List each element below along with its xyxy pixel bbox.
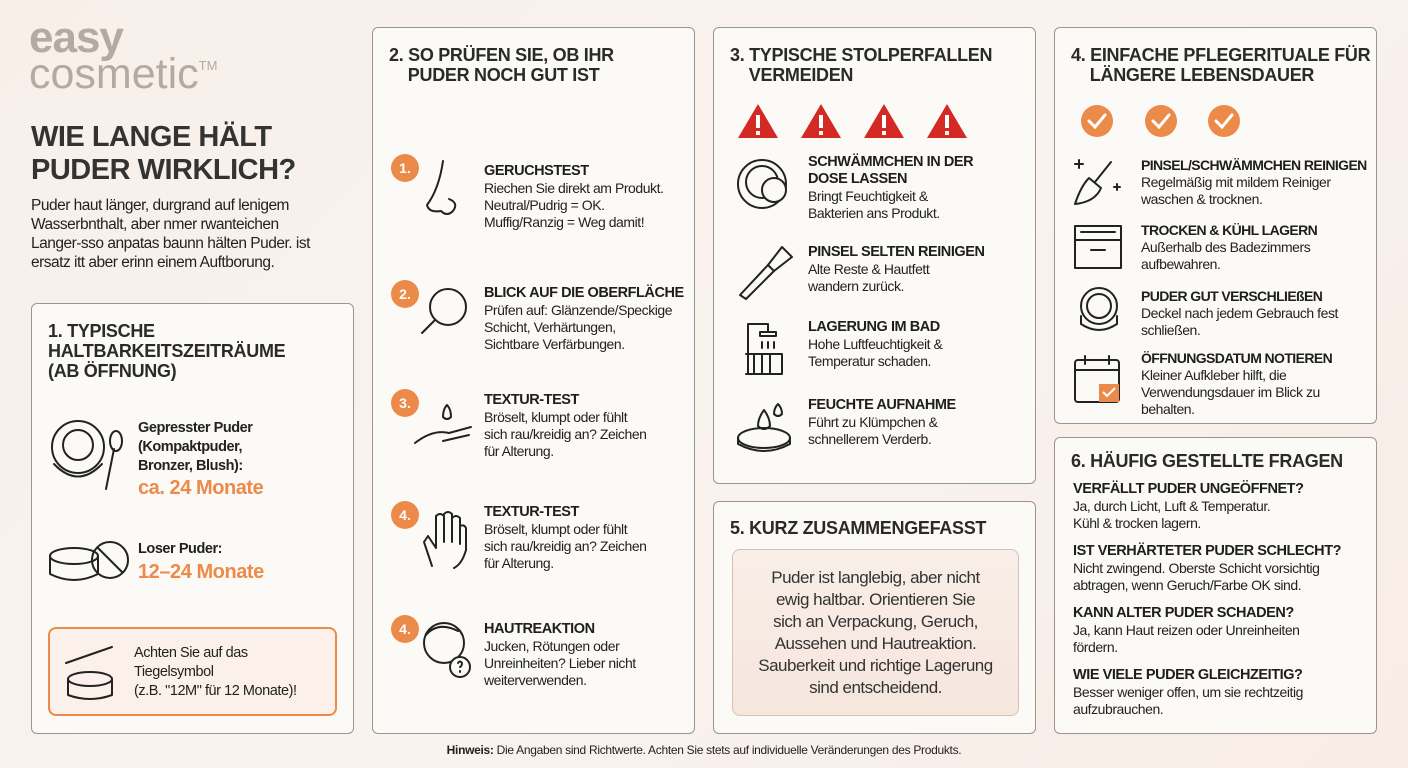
text: pressed powder: ca. 24 Monate — [138, 477, 263, 499]
logo: easy — [29, 13, 123, 62]
step 4: für Alterung. — [484, 555, 554, 571]
item: brush: Alte Reste & Hautfett — [808, 261, 929, 277]
faq 1: Ja, durch Licht, Luft & Temperatur. — [1073, 498, 1270, 514]
faq 1: Kühl & trocken lagern. — [1073, 515, 1201, 531]
step 2: BLICK AUF DIE OBERFLÄCHE — [484, 285, 684, 301]
text: loose powder: Loser Puder: — [138, 541, 222, 557]
panel: 6 FAQ — [1054, 437, 1377, 734]
item: bathroom — [745, 319, 943, 375]
item: sponge: Bakterien ans Produkt. — [808, 205, 940, 221]
intro text — [31, 197, 310, 271]
panel: 3 pitfalls — [713, 27, 1036, 484]
item: close: PUDER GUT VERSCHLIEßEN — [1141, 288, 1322, 304]
text: pressed powder: Gepresster Puder — [138, 420, 252, 436]
step 4: TEXTUR-TEST — [484, 504, 579, 520]
faq 1: VERFÄLLT PUDER UNGEÖFFNET? — [1073, 481, 1304, 497]
item: moisture: schnellerem Verderb. — [808, 431, 931, 447]
heading: 1. TYPISCHE — [48, 321, 155, 341]
step 1 — [391, 154, 663, 230]
icon: compact — [51, 420, 123, 490]
item: close — [1080, 287, 1338, 338]
text: pressed powder — [138, 420, 264, 499]
step 1: Muffig/Ranzig = Weg damit! — [484, 214, 644, 230]
step 3: 3. — [399, 395, 411, 411]
step 2: Prüfen auf: Glänzende/Speckige — [484, 302, 672, 318]
item: brush: wandern zurück. — [808, 278, 904, 294]
step 1: 1. — [399, 160, 411, 176]
item: date: Kleiner Aufkleber hilft, die — [1141, 367, 1286, 383]
step 1: GERUCHSTEST — [484, 163, 589, 179]
faq 3: KANN ALTER PUDER SCHADEN? — [1073, 605, 1294, 621]
item: storage — [1074, 222, 1317, 272]
intro text: ersatz itt aber erinn einem Auftborung. — [31, 254, 274, 271]
step 3: für Alterung. — [484, 443, 554, 459]
summary box: sind entscheidend. — [809, 678, 942, 697]
step 5: weiterverwenden. — [484, 672, 587, 688]
step 1: Riechen Sie direkt am Produkt. — [484, 180, 663, 196]
item: sponge — [737, 153, 974, 221]
icons: warnings — [738, 104, 967, 138]
item: date: ÖFFNUNGSDATUM NOTIEREN — [1141, 350, 1332, 366]
callout: jar symbol: Achten Sie auf das — [134, 645, 248, 661]
item: close: Deckel nach jedem Gebrauch fest — [1141, 305, 1338, 321]
item: date: Verwendungsdauer im Blick zu — [1141, 384, 1320, 400]
step 5: HAUTREAKTION — [484, 621, 595, 637]
item: moisture — [737, 397, 956, 452]
callout: jar symbol: Tiegelsymbol — [134, 664, 213, 680]
step 4: sich rau/kreidig an? Zeichen — [484, 538, 646, 554]
item: sponge: DOSE LASSEN — [808, 171, 907, 187]
item: storage: TROCKEN & KÜHL LAGERN — [1141, 222, 1317, 238]
summary box: Aussehen und Hautreaktion. — [775, 634, 976, 653]
step 4: Bröselt, klumpt oder fühlt — [484, 521, 627, 537]
item: bathroom: Temperatur schaden. — [808, 353, 931, 369]
step 4: 4. — [399, 507, 411, 523]
faq 2: Nicht zwingend. Oberste Schicht vorsichtig — [1073, 560, 1319, 576]
title: PUDER WIRKLICH? — [31, 154, 296, 186]
summary box: ewig haltbar. Orientieren Sie — [776, 590, 975, 609]
faq 4: WIE VIELE PUDER GLEICHZEITIG? — [1073, 667, 1302, 683]
step 2: 2. — [399, 286, 411, 302]
item: moisture: FEUCHTE AUFNAHME — [808, 397, 956, 413]
step 1: Neutral/Pudrig = OK. — [484, 197, 605, 213]
heading — [48, 321, 285, 381]
faq 1 — [1073, 480, 1304, 531]
heading: 6. HÄUFIG GESTELLTE FRAGEN — [1071, 451, 1343, 471]
step 2: Sichtbare Verfärbungen. — [484, 336, 625, 352]
item: date: behalten. — [1141, 401, 1195, 417]
item: storage: aufbewahren. — [1141, 256, 1220, 272]
panel: 4 care rituals — [1054, 27, 1377, 424]
heading: HALTBARKEITSZEITRÄUME — [48, 341, 285, 361]
footer note: Hinweis: Die Angaben sind Richtwerte. Achten Sie stets auf individuelle Veränderungen des Produkts. — [447, 743, 961, 757]
summary box — [732, 549, 1019, 716]
icons: checks — [1081, 105, 1240, 137]
faq 3: fördern. — [1073, 639, 1118, 655]
item: bathroom: Hohe Luftfeuchtigkeit & — [808, 336, 942, 352]
step 5: Unreinheiten? Lieber nicht — [484, 655, 636, 671]
item: storage: Außerhalb des Badezimmers — [1141, 239, 1310, 255]
faq 2 — [1073, 542, 1341, 593]
item: clean: waschen & trocknen. — [1141, 191, 1262, 207]
text: pressed powder: Bronzer, Blush): — [138, 458, 243, 474]
step 3: Bröselt, klumpt oder fühlt — [484, 409, 627, 425]
item: brush — [738, 244, 984, 300]
item: clean: PINSEL/SCHWÄMMCHEN REINIGEN — [1141, 157, 1367, 173]
text: pressed powder: (Kompaktpuder, — [138, 439, 242, 455]
heading — [389, 45, 614, 85]
title: WIE LANGE HÄLT — [31, 121, 272, 153]
item: brush: PINSEL SELTEN REINIGEN — [808, 244, 984, 260]
heading: 5. KURZ ZUSAMMENGEFASST — [730, 518, 986, 538]
panel: 2 checks — [372, 27, 695, 734]
item: close: schließen. — [1141, 322, 1200, 338]
heading: PUDER NOCH GUT IST — [408, 65, 599, 85]
intro text: Wasserbnthalt, aber nmer rwanteichen — [31, 216, 279, 233]
callout: jar symbol — [48, 627, 337, 716]
step 3: TEXTUR-TEST — [484, 392, 579, 408]
step 5: 4. — [399, 621, 411, 637]
panel: 5 summary — [713, 501, 1036, 734]
title — [31, 121, 296, 186]
step 4 — [391, 501, 646, 571]
heading: 3. TYPISCHE STOLPERFALLEN — [730, 45, 992, 65]
intro text: Puder haut länger, durgrand auf lenigem — [31, 197, 289, 214]
heading: (AB ÖFFNUNG) — [48, 361, 176, 381]
faq 3 — [1073, 605, 1300, 655]
step 3 — [391, 389, 646, 459]
step 5: Jucken, Rötungen oder — [484, 638, 619, 654]
logo: cosmeticTM — [29, 50, 217, 98]
step 2: Schicht, Verhärtungen, — [484, 319, 616, 335]
summary box: sich an Verpackung, Geruch, — [773, 612, 978, 631]
faq 4 — [1073, 667, 1303, 717]
faq 2: IST VERHÄRTETER PUDER SCHLECHT? — [1073, 543, 1341, 559]
heading: 4. EINFACHE PFLEGERITUALE FÜR — [1071, 45, 1370, 65]
step 2 — [391, 280, 684, 352]
panel: 1 shelf life — [31, 303, 354, 734]
icon: loose powder — [49, 541, 129, 581]
text: loose powder — [138, 541, 264, 583]
summary box: Puder ist langlebig, aber nicht — [771, 568, 980, 587]
heading: VERMEIDEN — [749, 65, 853, 85]
callout: jar symbol: (z.B. "12M" für 12 Monate)! — [134, 683, 297, 699]
item: clean: Regelmäßig mit mildem Reiniger — [1141, 174, 1331, 190]
heading — [1071, 45, 1370, 85]
faq 4: Besser weniger offen, um sie rechtzeitig — [1073, 684, 1303, 700]
heading: LÄNGERE LEBENSDAUER — [1090, 65, 1314, 85]
logo — [29, 13, 217, 98]
item: sponge: SCHWÄMMCHEN IN DER — [808, 154, 973, 170]
heading: 2. SO PRÜFEN SIE, OB IHR — [389, 45, 614, 65]
intro text: Langer-sso anpatas baunn hälten Puder. ist — [31, 235, 310, 252]
item: date — [1074, 350, 1332, 417]
step 5 — [391, 615, 636, 688]
faq 4: aufzubrauchen. — [1073, 701, 1163, 717]
item: bathroom: LAGERUNG IM BAD — [808, 319, 940, 335]
item: moisture: Führt zu Klümpchen & — [808, 414, 938, 430]
text: loose powder: 12–24 Monate — [138, 561, 264, 583]
step 3: sich rau/kreidig an? Zeichen — [484, 426, 646, 442]
faq 2: abtragen, wenn Geruch/Farbe OK sind. — [1073, 577, 1301, 593]
item: sponge: Bringt Feuchtigkeit & — [808, 188, 928, 204]
item: clean — [1074, 157, 1367, 207]
heading — [730, 45, 992, 85]
summary box: Sauberkeit und richtige Lagerung — [758, 656, 993, 675]
faq 3: Ja, kann Haut reizen oder Unreinheiten — [1073, 622, 1300, 638]
